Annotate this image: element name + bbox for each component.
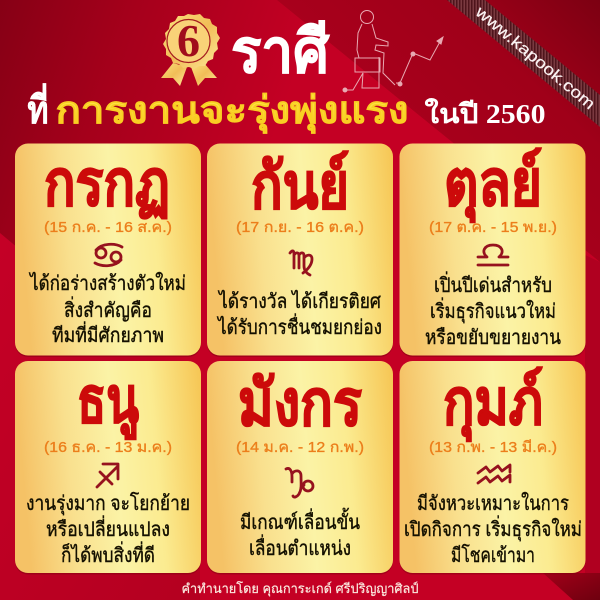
url ribbon [447, 0, 600, 127]
description: ได้รางวัล ได้เกียรติยศ [217, 290, 381, 313]
date range: (16 ธ.ค. - 13 ม.ค.) [44, 439, 172, 456]
date range: (15 ก.ค. - 16 ส.ค.) [44, 219, 172, 236]
subtitle [28, 83, 546, 134]
description [28, 272, 186, 347]
title: ราศี: ราศี [231, 18, 330, 85]
subtitle: การงานจะรุ่งพุ่งแรง: การงานจะรุ่งพุ่งแรง [56, 90, 408, 134]
description [26, 492, 190, 567]
date range: (14 ม.ค. - 12 ก.พ.) [236, 439, 364, 456]
description: เลื่อนตำแหน่ง [249, 534, 351, 560]
sign name: กันย์ [251, 150, 349, 222]
description: เปิ่นปีเด่นสำหรับ [434, 271, 552, 297]
description: ทีมที่มีศักยภาพ [52, 321, 164, 347]
date range: (17 ก.ย. - 16 ต.ค.) [236, 219, 364, 236]
sign name: ตุลย์ [444, 147, 542, 223]
subtitle: ในปี 2560: ในปี 2560 [424, 98, 546, 129]
icon: gold medal with number 6 [161, 14, 220, 86]
date range: (13 ก.พ. - 13 มี.ค.) [429, 439, 557, 456]
subtitle: ที่: ที่ [28, 83, 48, 132]
description [240, 508, 360, 560]
date range: (17 ต.ค. - 15 พ.ย.) [429, 219, 557, 236]
sign name: ธนู [77, 365, 139, 440]
ribbon url text: www.kapook.com [471, 3, 598, 113]
sign name: กุมภ์ [443, 366, 543, 442]
icon: virgo [290, 251, 312, 275]
panel: กรกฎ [15, 144, 201, 357]
description: หรือเปลี่ยนแปลง [46, 515, 170, 541]
description: มีจังหวะเหมาะในการ [417, 492, 569, 515]
icon: capricorn [286, 468, 313, 497]
icon: cancer [95, 244, 122, 266]
panel: กันย์ [207, 144, 393, 357]
description: สิ่งสำคัญคือ [64, 296, 152, 322]
icon: libra [478, 245, 508, 265]
description: หรือขยับขยายงาน [425, 327, 561, 349]
description: ก็ได้พบสิ่งที่ดี [61, 541, 155, 567]
sign name: กรกฏ [44, 148, 170, 219]
footer credit: คำทำนายโดย คุณการะเกด์ ศรีปริญญาศิลป์ [182, 581, 418, 597]
description [216, 290, 382, 339]
panel: ธนู [15, 361, 201, 574]
panel: กุมภ์ [400, 361, 586, 574]
description: มีโชคเข้ามา [451, 544, 535, 567]
icon: aquarius [478, 465, 510, 483]
description [404, 492, 582, 567]
icon: sagittarius [97, 464, 118, 487]
description: มีเกณฑ์เลื่อนขั้น [240, 508, 360, 534]
panel: ตุลย์ [400, 144, 586, 357]
description: ได้ก่อร่างสร้างตัวใหม่ [28, 272, 186, 295]
description: เริ่มธุรกิจแนวใหม่ [430, 297, 556, 324]
description [425, 271, 561, 349]
description: ได้รับการชื่นชมยกย่อง [216, 313, 382, 339]
description: งานรุ่งมาก จะโยกย้าย [26, 492, 190, 516]
medal number: 6 [177, 15, 200, 66]
icon: businessman climbing chart line [343, 10, 443, 92]
panel: มังกร [207, 361, 393, 574]
sign name: มังกร [238, 368, 362, 439]
